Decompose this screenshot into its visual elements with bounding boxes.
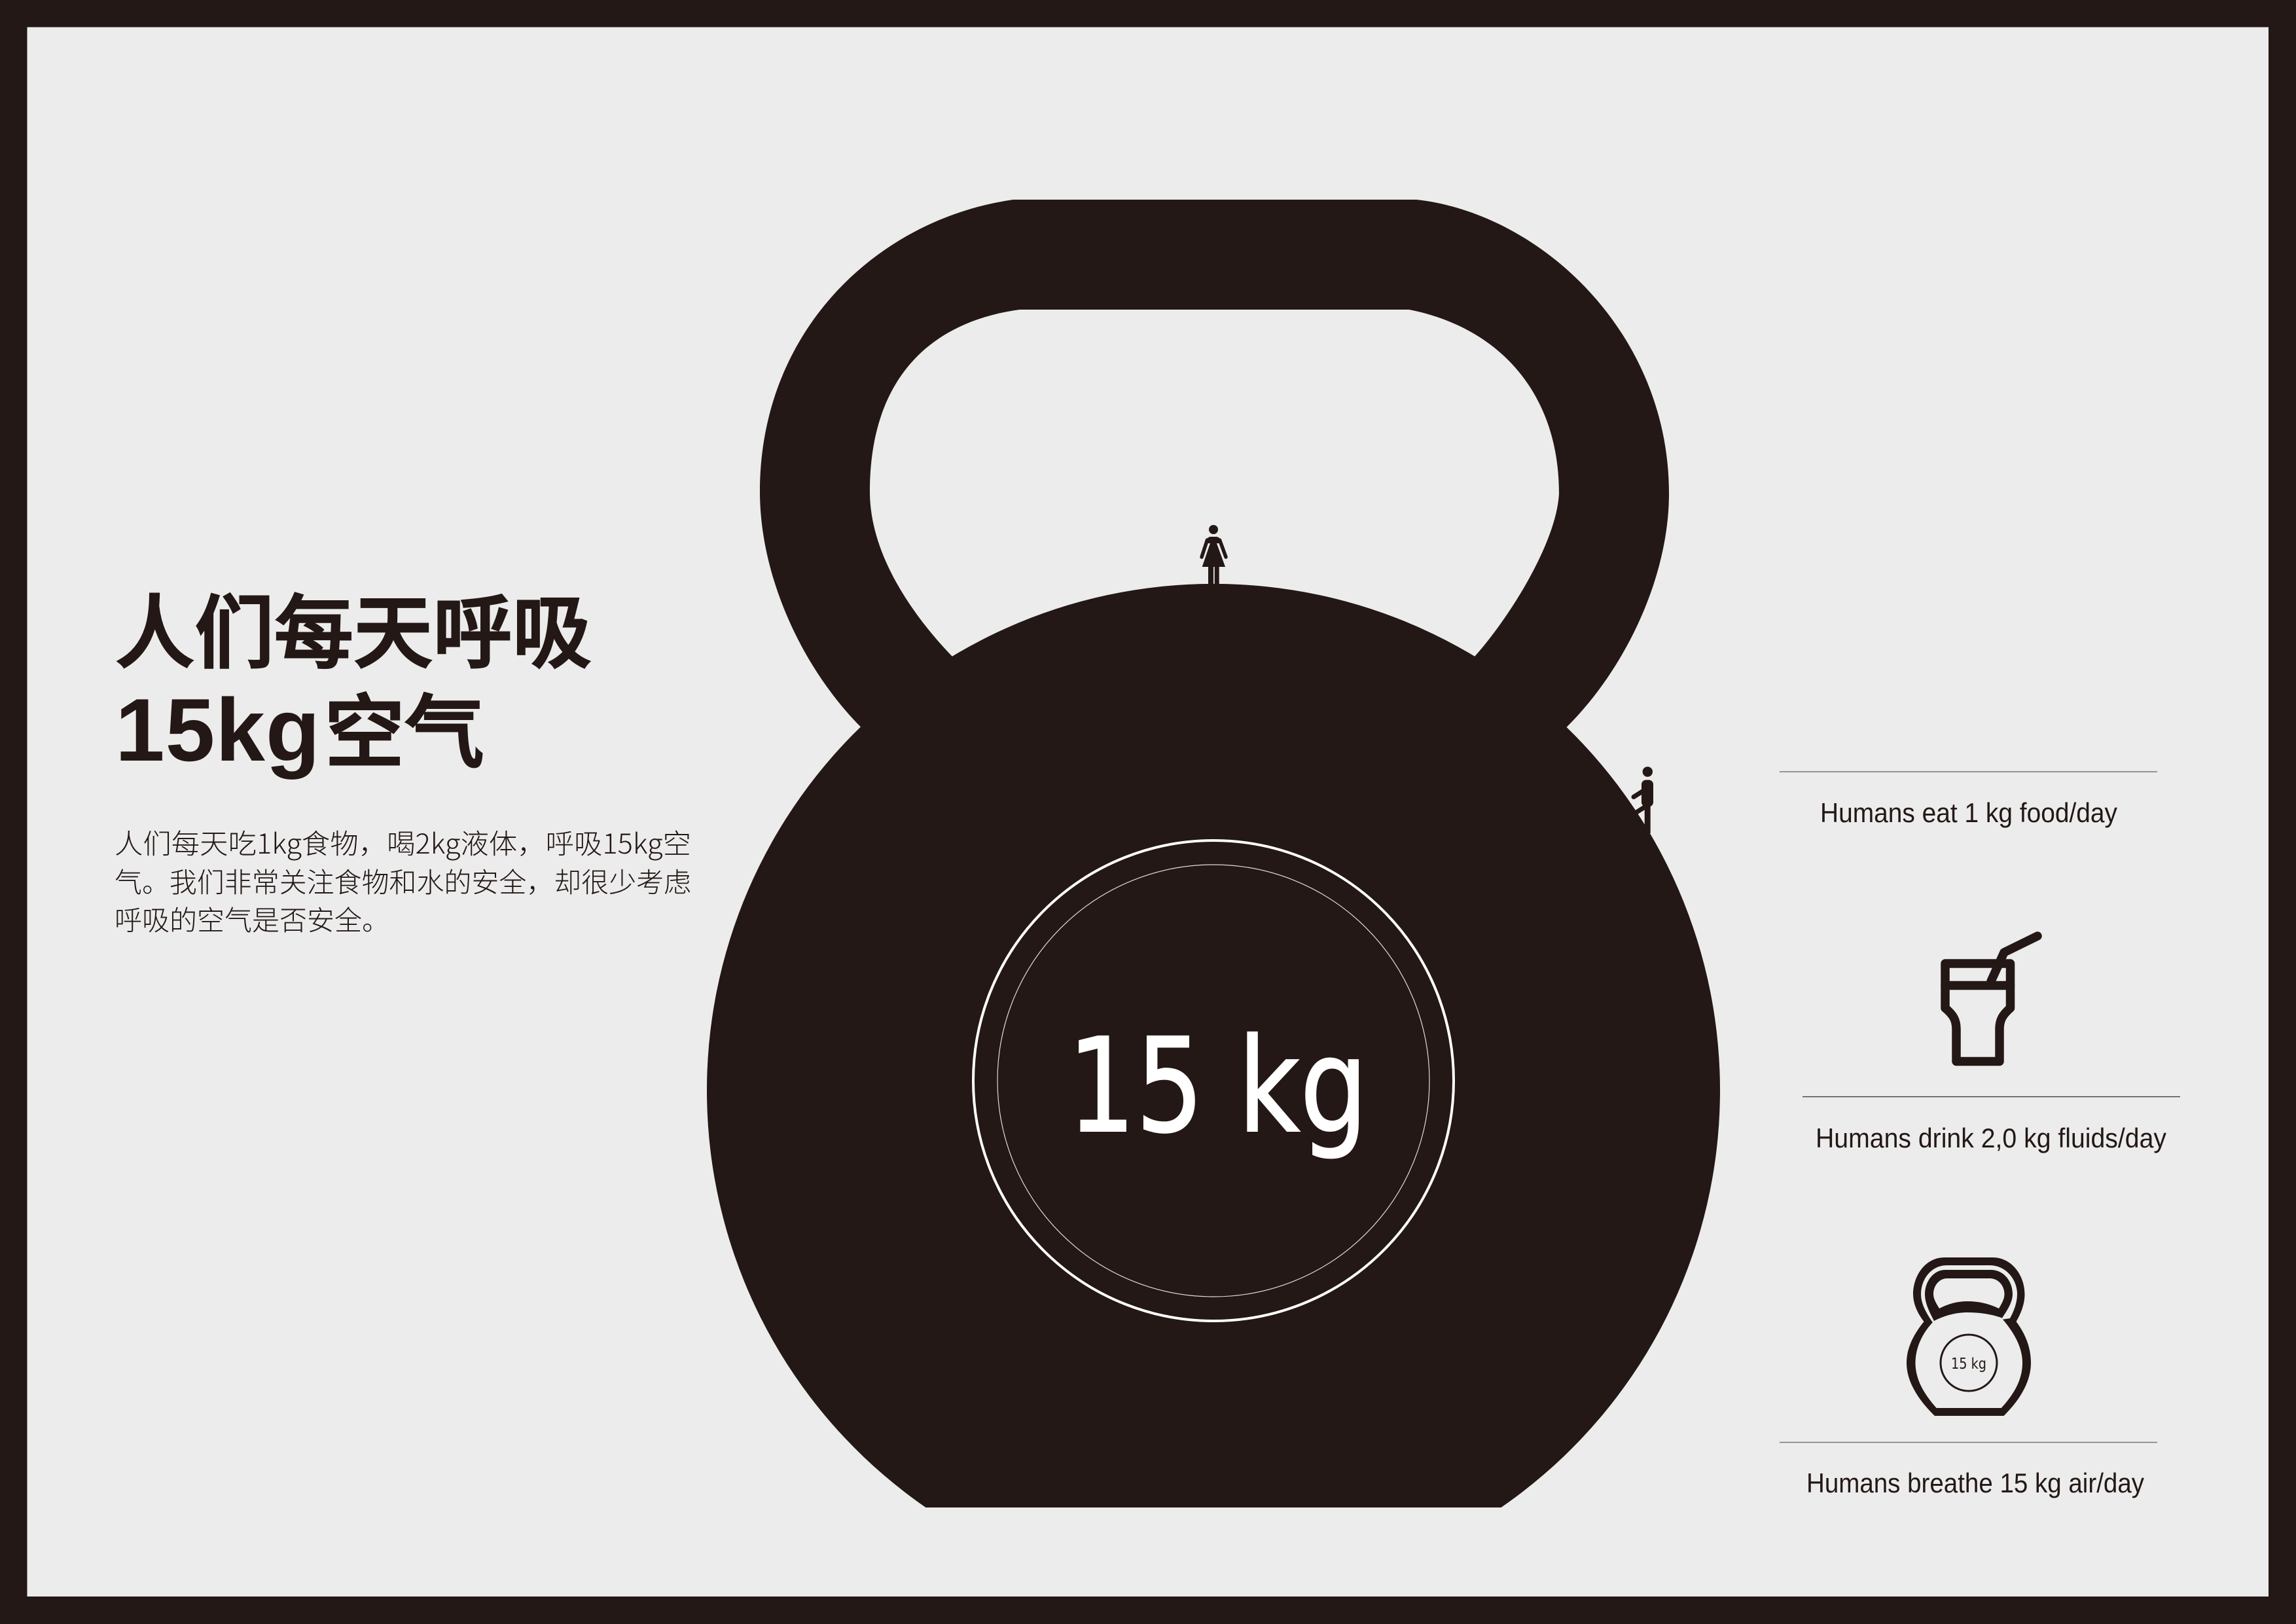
intro text block [115, 822, 691, 939]
intro text block: 气。我们非常关注食物和水的安全，却很少考虑 [115, 861, 691, 901]
kettlebell body [707, 584, 1720, 1507]
title [115, 589, 592, 780]
label: fluids: Humans drink 2,0 kg fluids/day [1816, 1123, 2166, 1153]
title: 15kg空气 [115, 680, 484, 780]
weight label: 15 kg [1067, 1010, 1368, 1162]
item: air [1780, 1257, 2157, 1498]
kettlebell handle [760, 200, 1669, 727]
icon: drink with straw [1945, 936, 2037, 1062]
giant kettlebell [707, 200, 1720, 1507]
label: food: Humans eat 1 kg food/day [1820, 797, 2117, 828]
weight plate outer ring [973, 840, 1454, 1321]
icon: small kettlebell: 15 kg [1951, 1356, 1986, 1373]
icon: small kettlebell [1907, 1257, 2031, 1416]
intro text block: 呼吸的空气是否安全。 [115, 899, 389, 939]
weight plate inner ring [997, 865, 1429, 1297]
item: fluids [1803, 936, 2180, 1153]
intro text block: 人们每天吃1kg食物，喝2kg液体，呼吸15kg空 [115, 822, 691, 862]
icon: person climbing kettlebell [1634, 767, 1653, 833]
icon: woman standing on kettlebell [1202, 525, 1226, 586]
title: 人们每天呼吸 [115, 589, 592, 678]
label: air: Humans breathe 15 kg air/day [1806, 1468, 2144, 1498]
